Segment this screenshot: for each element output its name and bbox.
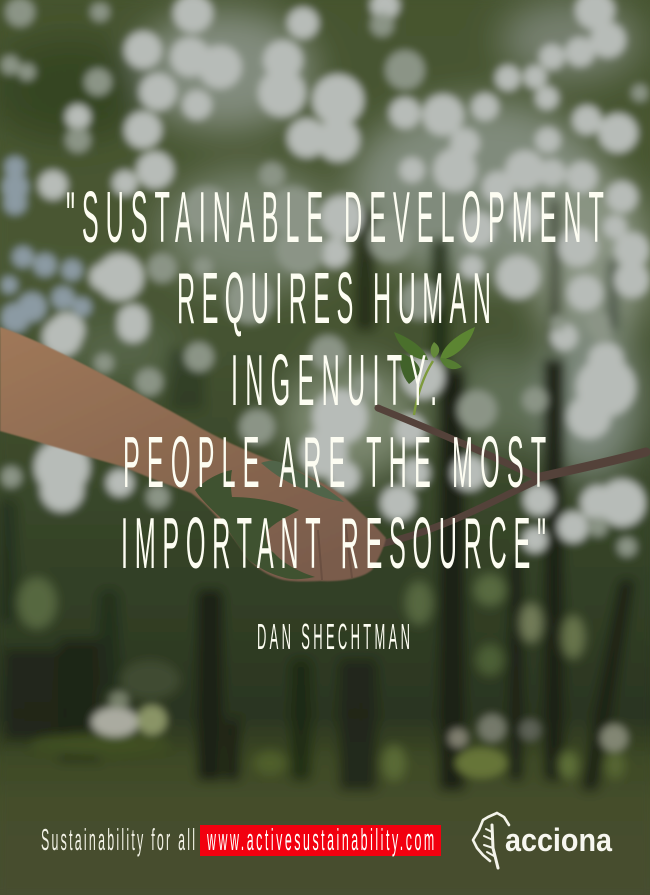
quote: PEOPLE ARE THE MOST: [123, 423, 546, 503]
quote: INGENUITY.: [231, 341, 437, 421]
quote: REQUIRES HUMAN: [177, 259, 491, 339]
bokeh: dim discs: [0, 0, 649, 557]
bokeh: blue-grey discs at left: [0, 156, 92, 333]
quote: "SUSTAINABLE DEVELOPMENT: [66, 178, 604, 258]
quote author: DAN SHECHTMAN: [257, 617, 410, 657]
acciona logo: [473, 813, 612, 868]
quote: IMPORTANT RESOURCE": [121, 504, 546, 584]
photo: arm and hand: [0, 327, 386, 582]
low forest lights: [17, 574, 625, 781]
dark tree trunks: [0, 200, 634, 790]
sprout leaves: [394, 332, 428, 360]
leaf on wrist: [195, 470, 315, 579]
finger shading: [318, 520, 352, 580]
soft canopy haze: [0, 0, 650, 480]
icon: leaf: [473, 813, 509, 868]
photo: branch with sprout: [372, 327, 646, 546]
footer link badge: www.activesustainability.com: [206, 824, 434, 858]
bokeh: bright discs: [34, 0, 650, 553]
footer tagline: Sustainability for all: [41, 824, 195, 858]
logotype: acciona: [505, 822, 612, 858]
quote: [66, 178, 604, 584]
sprout stem: [414, 361, 433, 415]
leaf on hand: [261, 461, 344, 502]
